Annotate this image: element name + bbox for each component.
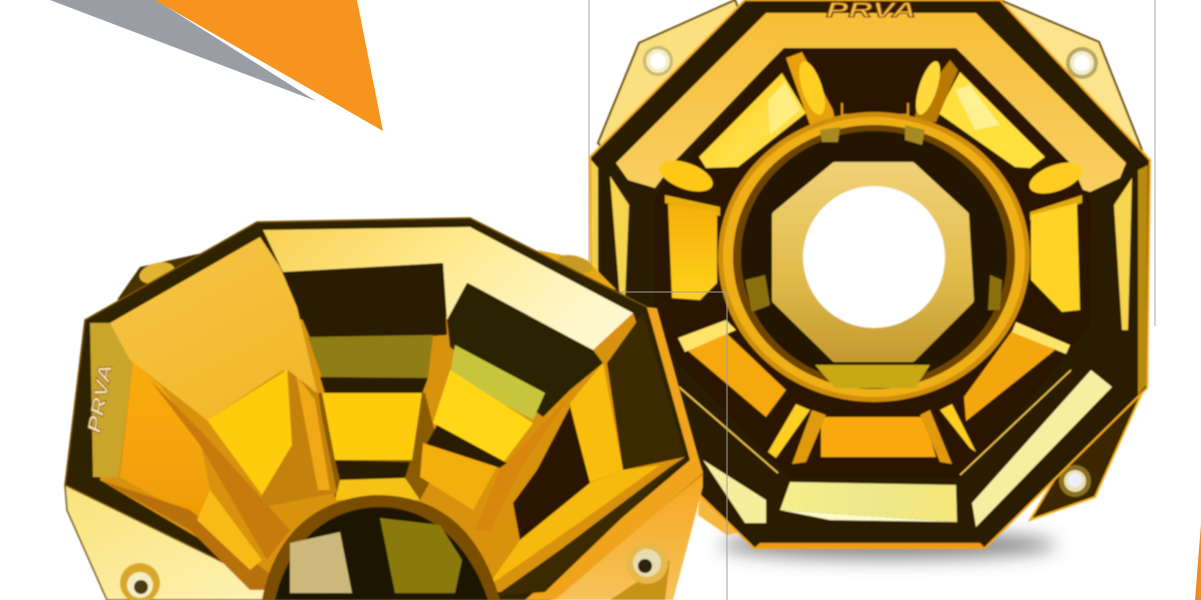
left horn: centre yellow panel	[322, 393, 422, 460]
decorative orange sliver, bottom right	[1195, 524, 1201, 600]
left horn: dark panel beside centre	[447, 283, 603, 417]
guide line: left vertical	[588, 0, 590, 292]
right horn: octagonal neck	[776, 166, 970, 358]
right horn: thin gold edge lines	[679, 370, 1071, 475]
right horn: mounting ears	[598, 0, 1142, 535]
left horn: lime panel	[450, 345, 545, 420]
guide line: horizontal	[620, 291, 727, 293]
right horn: upper yellow panels	[699, 72, 1045, 168]
right horn: central hole	[803, 186, 945, 328]
left horn	[65, 218, 703, 600]
right horn: dark inner octagon	[655, 48, 1091, 478]
left horn: throat ring	[262, 495, 500, 600]
left horn: dark olive right panel	[607, 313, 685, 470]
left horn: dark brown reflection	[513, 407, 590, 540]
left horn: lower yellow panel	[420, 443, 497, 510]
guide line: right vertical	[1154, 0, 1156, 326]
right horn: side rib highlights	[655, 154, 1087, 220]
right horn: outer side strips	[591, 160, 1148, 548]
shadow under right horn	[720, 531, 1056, 559]
left horn: interior gold base	[100, 313, 685, 592]
left horn: mid left yellow panel	[207, 370, 292, 495]
left horn: lower right yellow panel	[487, 465, 660, 587]
left horn: olive stripe	[308, 335, 433, 378]
right horn: gold throat ring	[718, 112, 1030, 402]
left horn: PRVA logo: PRVA	[84, 362, 117, 435]
left horn: orange streak at right	[475, 395, 570, 530]
left horn: octagon body	[65, 218, 703, 600]
left horn: mid rib	[262, 370, 337, 507]
left horn: top bright strip	[263, 227, 633, 350]
left horn: right orange rim	[525, 307, 703, 600]
left horn: pale throat reflection	[290, 532, 352, 593]
left horn: orange streaks	[100, 380, 290, 590]
left horn: right yellow panel	[570, 363, 623, 483]
left horn: left olive rim	[90, 323, 133, 477]
right horn: lower yellow panels	[678, 320, 1070, 464]
left horn: mounting ears	[117, 250, 617, 300]
right horn	[590, 0, 1150, 548]
left horn: large light panel	[110, 237, 317, 420]
left horn: lower dark wedge	[495, 457, 685, 596]
left horn: olive throat reflection	[380, 518, 462, 593]
decorative grey triangle	[50, 0, 316, 101]
left horn: centre dark backing	[318, 393, 442, 500]
left horn: lower flange	[65, 470, 703, 600]
decorative orange triangle	[155, 0, 383, 131]
left horn: dark throat	[275, 507, 488, 600]
left horn: yellow panel, right of centre	[433, 370, 533, 463]
left horn: centre top dark panel	[283, 263, 447, 338]
guide line: lower vertical	[726, 292, 728, 600]
right horn: outer octagon body	[590, 0, 1150, 548]
left horn: dark stripe	[320, 377, 428, 394]
right horn: top dark panel rib highlights	[786, 52, 958, 125]
right horn: left and right yellow panels	[668, 203, 1080, 312]
left horn: dark stripe, right of centre	[426, 425, 507, 468]
left horn: centre dark stripe	[335, 460, 410, 480]
left horn: centre rim band	[335, 478, 420, 500]
right horn: upper light band	[616, 13, 1126, 192]
left horn: orange panel	[120, 362, 210, 520]
